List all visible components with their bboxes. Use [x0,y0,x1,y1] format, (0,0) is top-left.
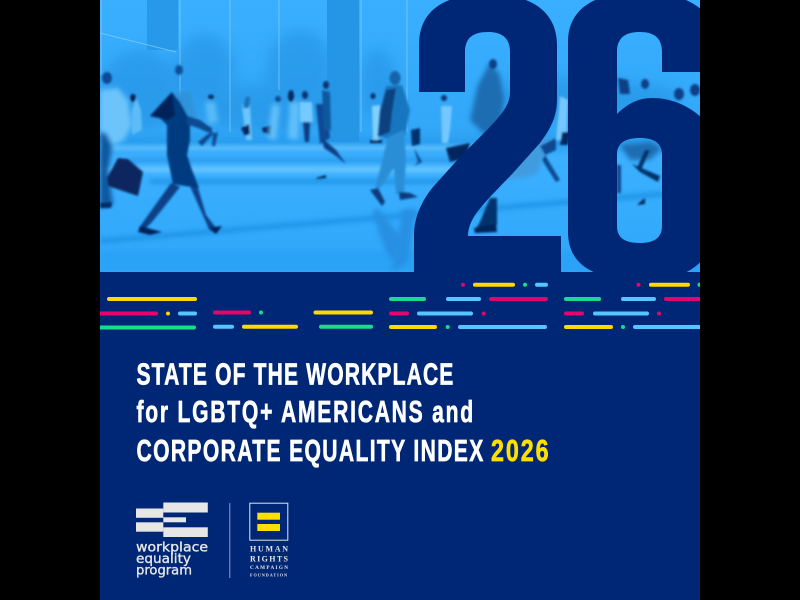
title block [136,356,549,468]
title line 3: CORPORATE EQUALITY INDEX [136,433,484,468]
figure: man walking with jacket over shoulder [370,71,422,272]
logo: Human Rights Campaign Foundation: HUMAN [250,545,288,554]
logo: Human Rights Campaign Foundation: CAMPAIGN [250,565,288,571]
logo: Human Rights Campaign Foundation: FOUNDATION [250,572,287,577]
logo: workplace equality program [136,502,208,578]
photo: blurred commuters in a bright lobby [100,0,700,272]
big numeral: 6 [568,0,704,280]
title year: 2026 [491,433,549,468]
panel: poster background [100,0,700,600]
figure: central walker in dark suit [138,65,222,235]
title line 2: for LGBTQ+ AMERICANS and [136,394,473,429]
figure: left blurred walker with briefcase [100,72,143,208]
logo: workplace equality program: workplace [136,540,208,556]
big numeral: 2 [414,0,561,272]
logo: Human Rights Campaign Foundation [250,503,289,577]
figure: walkers visible through the numerals [441,59,700,233]
logo: Human Rights Campaign Foundation: RIGHTS [250,554,289,563]
title line 1: STATE OF THE WORKPLACE [136,356,453,392]
logo: workplace equality program: equality [136,551,191,567]
figure: group of distant walkers [241,81,384,179]
decorative colored dash pattern [98,285,704,328]
logo: workplace equality program: program [136,562,192,578]
logo divider [229,503,230,578]
